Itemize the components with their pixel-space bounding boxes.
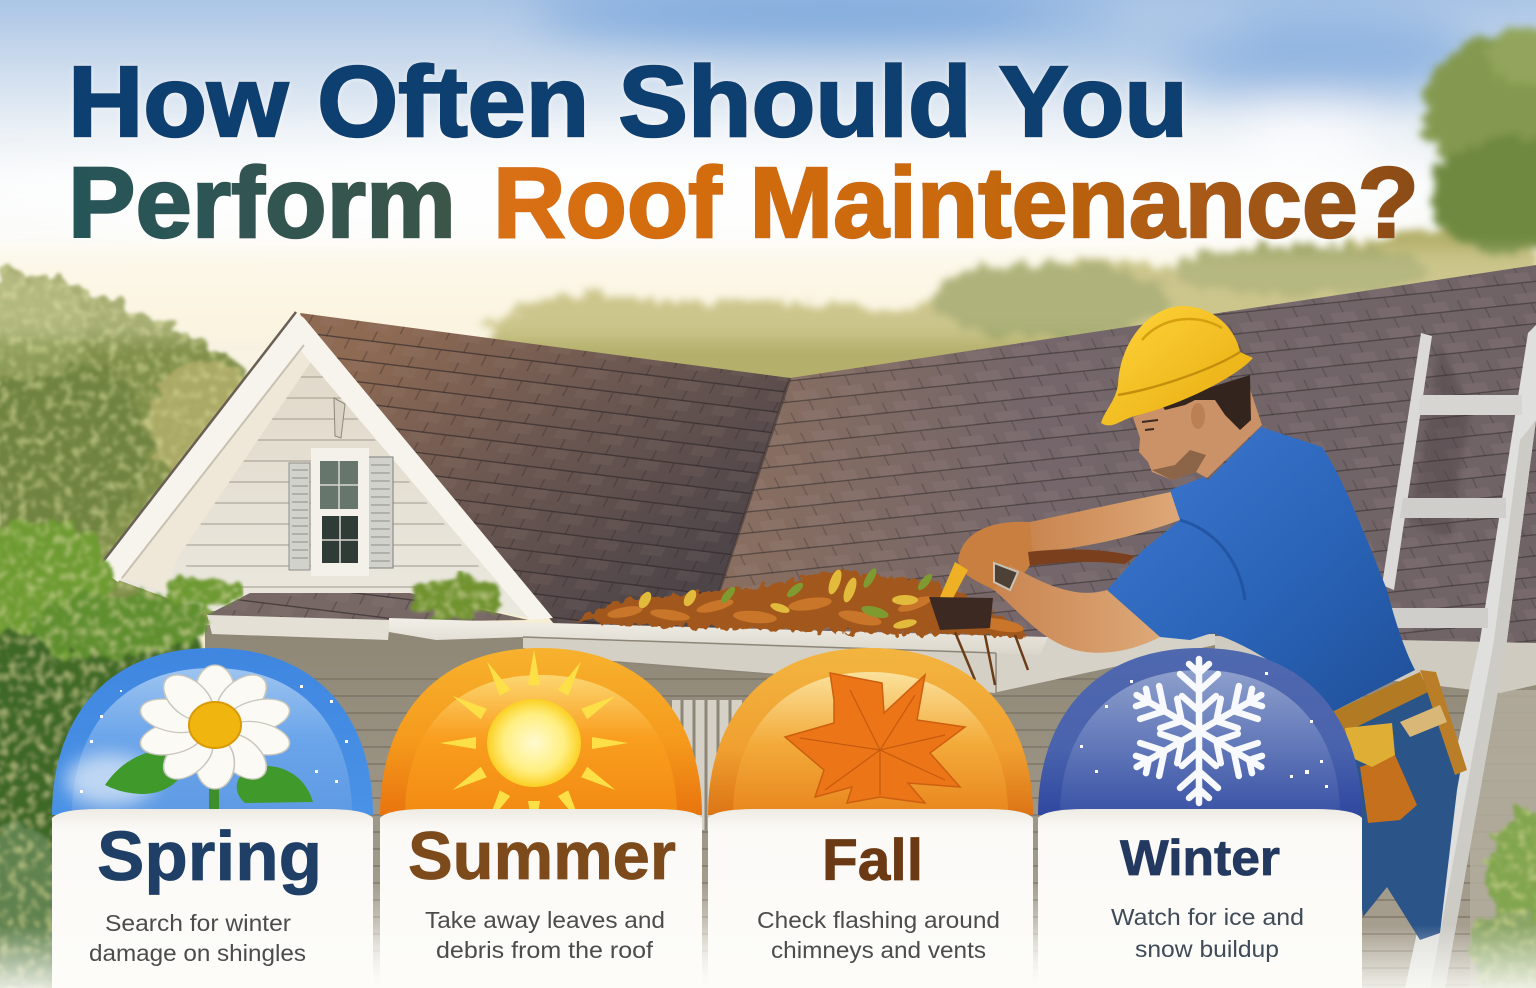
worker: tool belt [1332, 670, 1467, 823]
worker: shirt fold [1180, 520, 1245, 600]
fall dome [708, 648, 1033, 815]
warm haze over trees [0, 250, 1536, 340]
leaves and debris in gutter [575, 566, 1030, 685]
icon: maple leaf [785, 673, 965, 803]
right roof [700, 265, 1536, 650]
louvered vent on wall [672, 700, 742, 830]
summer dome inner arch [405, 675, 677, 815]
foreground bush: right [1470, 810, 1536, 988]
title line 1: How Often Should You [68, 46, 1188, 158]
gutter right [1215, 636, 1536, 693]
title line 2 highlight: Roof Maintenance? [493, 147, 1419, 259]
winter description [1111, 904, 1304, 962]
icon: sun [440, 649, 628, 837]
worker: ear [1191, 403, 1205, 429]
spring dome inner arch [65, 668, 352, 815]
panel: fall [708, 648, 1033, 988]
worker: jeans [1340, 680, 1460, 940]
worker: watch [994, 563, 1018, 590]
shrub on gutter [411, 575, 499, 619]
gutter front [389, 618, 1048, 655]
fall description: Check flashing around [757, 907, 1000, 933]
foreground bush: left [0, 520, 210, 988]
ladder [1382, 325, 1536, 988]
summer heading: Summer [408, 818, 676, 894]
left roof [300, 313, 790, 632]
winter description: snow buildup [1135, 936, 1279, 962]
ladder shadow on roof [1410, 345, 1470, 540]
winter description: Watch for ice and [1111, 904, 1304, 930]
worker: hose [1028, 549, 1135, 566]
lower gutter [207, 615, 390, 640]
spring dome [52, 648, 373, 815]
clouds and blue patches [0, 0, 1500, 240]
fall card [708, 809, 1033, 988]
panel: summer [380, 648, 702, 988]
window with shutters [289, 448, 393, 576]
gable trim [98, 312, 553, 620]
wall right of ladder [1470, 690, 1536, 988]
spring heading: Spring [97, 817, 322, 895]
worker: hard hat [1101, 306, 1253, 425]
fall description [757, 907, 1000, 963]
background trees: horizon [490, 210, 1536, 400]
spring description [89, 910, 306, 966]
summer dome [380, 648, 702, 815]
icon: snowflake [1127, 659, 1271, 803]
panel: winter [1038, 648, 1362, 988]
dormer vent [334, 398, 345, 438]
fall heading: Fall [822, 828, 923, 893]
roof valley [718, 378, 790, 595]
worker: head [1133, 383, 1262, 480]
shrub at gable corner [164, 574, 236, 610]
icon: daisy [105, 665, 313, 810]
spring description: damage on shingles [89, 940, 306, 966]
worker: hands [958, 522, 1033, 590]
gutter and fascia [389, 618, 1536, 693]
panel: spring [52, 648, 373, 988]
fascia band [523, 637, 996, 693]
worker: scoop [929, 562, 993, 630]
gaps between cards fade [372, 880, 1039, 988]
worker: beard [1152, 450, 1206, 480]
winter card [1038, 809, 1362, 988]
worker: shirt [1107, 427, 1415, 713]
background trees: upper right [1423, 27, 1536, 253]
spring description: Search for winter [105, 910, 291, 936]
summer card [380, 809, 702, 988]
title line 2 start: Perform [68, 147, 456, 259]
house wall [205, 625, 1536, 988]
summer description: debris from the roof [436, 937, 654, 963]
summer description: Take away leaves and [425, 907, 665, 933]
fall dome inner arch [733, 672, 1008, 815]
winter heading: Winter [1120, 830, 1280, 886]
gable soffit band [122, 350, 311, 592]
fall description: chimneys and vents [771, 937, 986, 963]
background trees: left [0, 269, 260, 620]
winter dome inner arch [1060, 670, 1340, 815]
bottom fade [0, 925, 1536, 988]
worker: eye and brow [1142, 420, 1158, 430]
eave return [993, 634, 1215, 693]
lower left roof [207, 593, 528, 622]
spring card [52, 809, 373, 988]
title [68, 46, 1419, 259]
worker: rear arm [1030, 490, 1180, 552]
worker: hair [1160, 375, 1251, 430]
winter dome [1038, 648, 1362, 815]
summer description [425, 907, 665, 963]
gable wall [118, 345, 530, 618]
worker: front arm [994, 565, 1160, 653]
worker [929, 306, 1467, 940]
